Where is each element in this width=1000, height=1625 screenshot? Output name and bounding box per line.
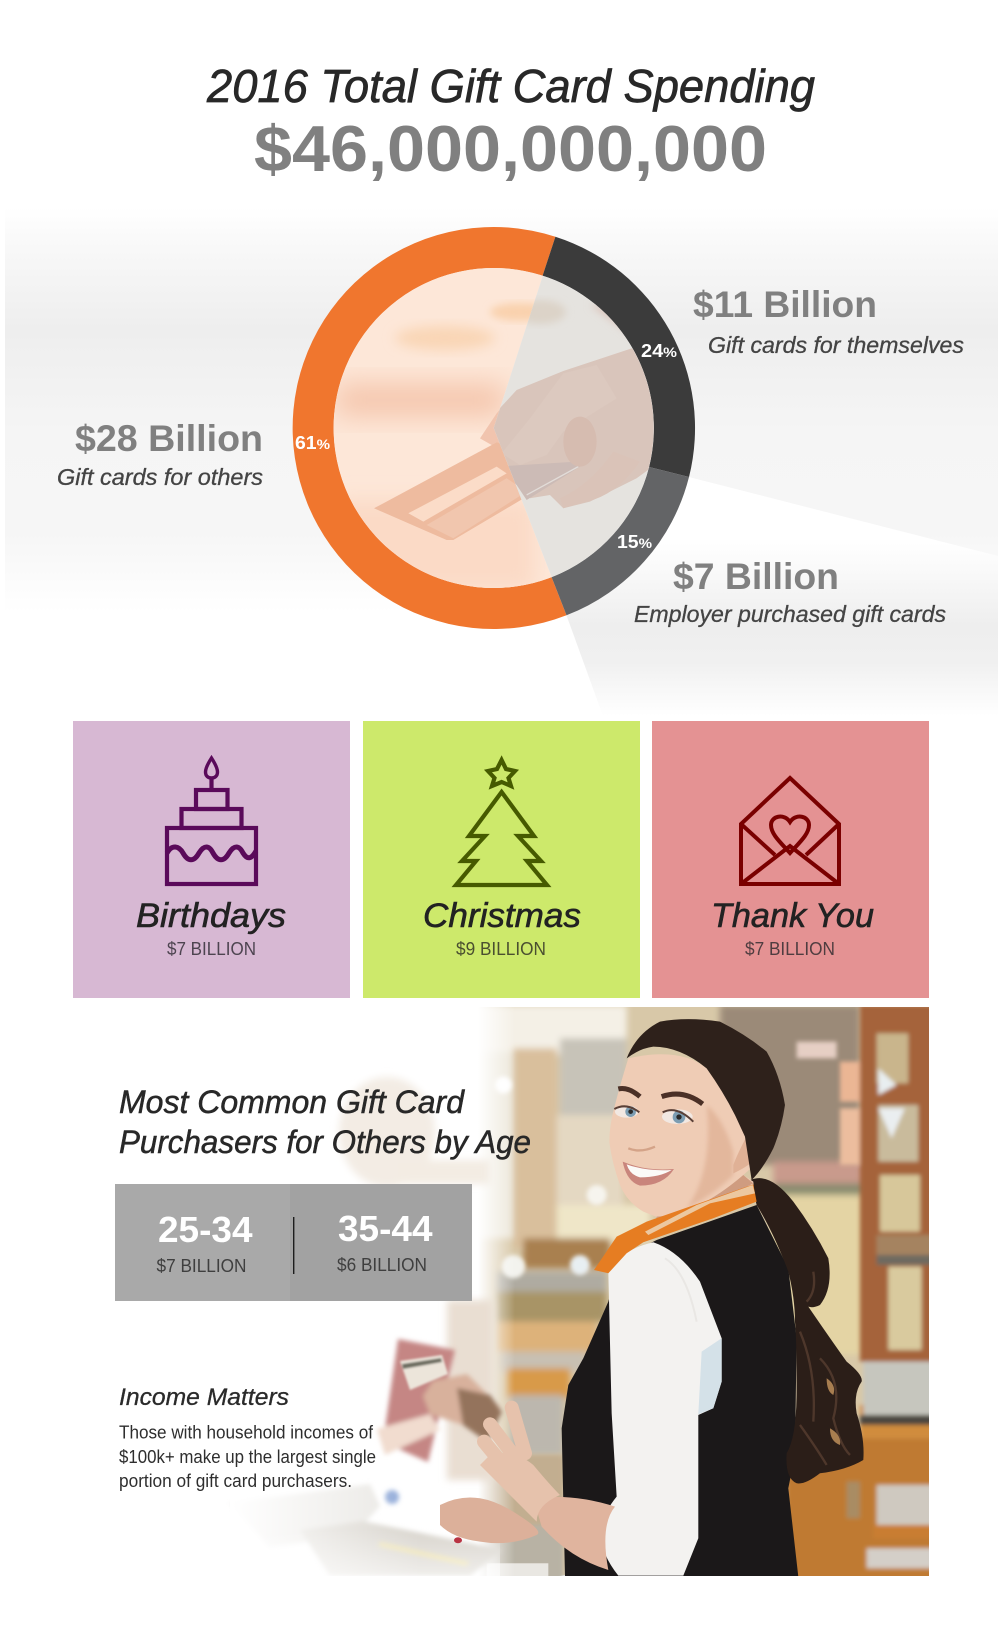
label: $11 billion	[693, 284, 965, 358]
photo: woman's face	[610, 1054, 754, 1217]
heading: most common purchasers	[119, 1084, 531, 1160]
panel: age ranges	[115, 1184, 472, 1301]
heading: most common purchasers: Purchasers for Others by Age	[119, 1124, 531, 1160]
label: $28 billion: Gift cards for others	[57, 464, 263, 490]
panel: christmas: Christmas	[423, 897, 581, 935]
text block: income matters: Those with household incomes of	[119, 1422, 374, 1442]
age 35-44	[337, 1208, 432, 1275]
donut centre: faded hand and card photo	[330, 265, 670, 595]
age 25-34	[156, 1209, 252, 1276]
photo: woman's arm and hand	[533, 1497, 615, 1570]
age 25-34: $7 BILLION	[156, 1256, 246, 1276]
photo: white fade on left side	[467, 1007, 513, 1576]
age 35-44: $6 BILLION	[337, 1255, 427, 1275]
photo: facial features	[614, 1089, 703, 1186]
panel: birthdays: Birthdays	[136, 897, 286, 935]
age 25-34: 25-34	[158, 1209, 252, 1250]
title	[206, 60, 815, 185]
labels: percent values: 61%	[295, 433, 331, 453]
panel: photo of gift card purchase at shop	[283, 1007, 929, 1576]
donut: dark segment 24%	[543, 237, 695, 477]
photo: woman	[440, 1019, 864, 1577]
panel: christmas	[363, 721, 640, 998]
panel: thank you: Thank You	[711, 897, 874, 935]
donut chart with card photo	[293, 227, 695, 629]
donut: orange segment 61%	[293, 227, 566, 629]
icon: christmas tree	[456, 760, 547, 885]
donut chart with card photo: 15%	[617, 532, 653, 552]
label: $28 billion	[57, 418, 263, 490]
donut: grey segment 15%	[552, 467, 689, 615]
label: $28 billion: $28 Billion	[75, 418, 263, 459]
photo: white tray at counter edge	[487, 1563, 548, 1577]
icon: envelope with heart	[741, 778, 839, 884]
label: $7 billion: $7 Billion	[673, 556, 839, 597]
panel: thank you	[652, 721, 929, 998]
text block: income matters	[119, 1384, 376, 1491]
icon: birthday cake	[167, 758, 256, 884]
heading: most common purchasers: Most Common Gift Card	[119, 1084, 465, 1120]
photo: woman's hair	[627, 1019, 785, 1180]
label: $7 billion	[634, 556, 946, 627]
label: $11 billion: $11 Billion	[693, 284, 877, 325]
panel: thank you: $7 BILLION	[745, 939, 835, 959]
photo: faded cashier in the background	[283, 1075, 504, 1576]
donut chart with card photo: 24%	[641, 341, 678, 361]
photo: woman's vest	[562, 1205, 798, 1577]
title: $46,000,000,000	[254, 112, 767, 185]
label: $7 billion: Employer purchased gift cards	[634, 601, 946, 627]
panel: christmas: $9 BILLION	[456, 939, 546, 959]
photo: woman's ponytail	[751, 1178, 864, 1483]
photo: woman's sleeve	[600, 1242, 722, 1576]
text block: income matters: Income Matters	[119, 1384, 289, 1411]
panel: birthdays: $7 BILLION	[167, 939, 256, 959]
text block: income matters: $100k+ make up the largest single	[119, 1447, 376, 1467]
age 35-44: 35-44	[338, 1208, 432, 1249]
photo: blurred shop background	[470, 1005, 937, 1582]
title: 2016 Total Gift Card Spending	[206, 60, 815, 112]
photo: orange scarf	[594, 1184, 757, 1273]
label: $11 billion: Gift cards for themselves	[708, 332, 965, 358]
panel: birthdays	[73, 721, 350, 998]
text block: income matters: portion of gift card purchasers.	[119, 1471, 352, 1491]
background: grey band behind donut	[5, 208, 998, 716]
